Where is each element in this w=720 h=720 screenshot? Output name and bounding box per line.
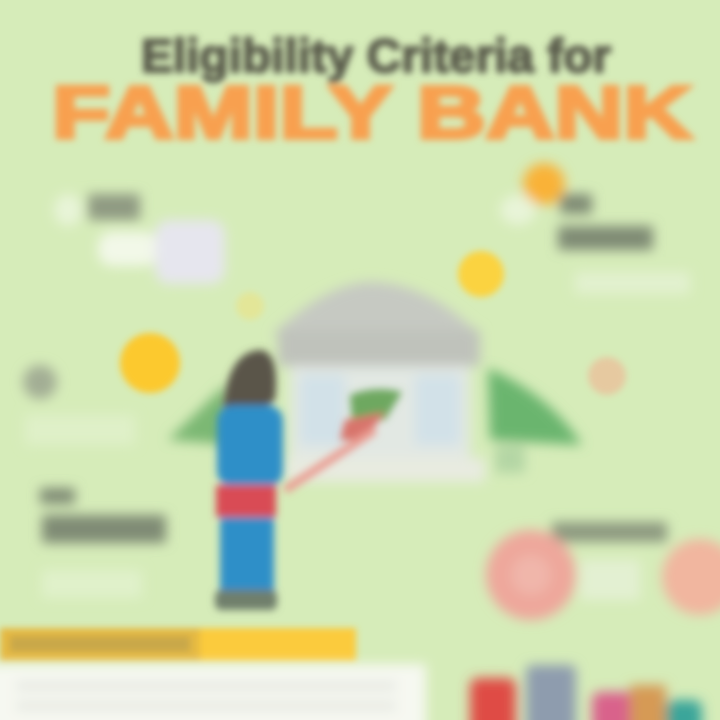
- panel: top right criterion: [500, 163, 690, 294]
- banner: note heading: [0, 628, 356, 662]
- panel: bottom right criterion: [486, 522, 720, 620]
- panel: top left criterion: [54, 194, 225, 284]
- title: FAMILY BANK: [52, 71, 692, 154]
- chart: people icons bars: [470, 665, 702, 720]
- icon: growth arrow: [285, 389, 402, 490]
- panel: note text: [0, 664, 426, 720]
- icon: coins: [120, 251, 626, 395]
- icon: leaves behind bank: [168, 368, 582, 473]
- panel: left criterion: [23, 365, 166, 598]
- title: Eligibility Criteria for: [141, 29, 611, 82]
- figure: woman: [215, 350, 283, 610]
- icon: bank building: [272, 282, 485, 482]
- title: [52, 29, 692, 154]
